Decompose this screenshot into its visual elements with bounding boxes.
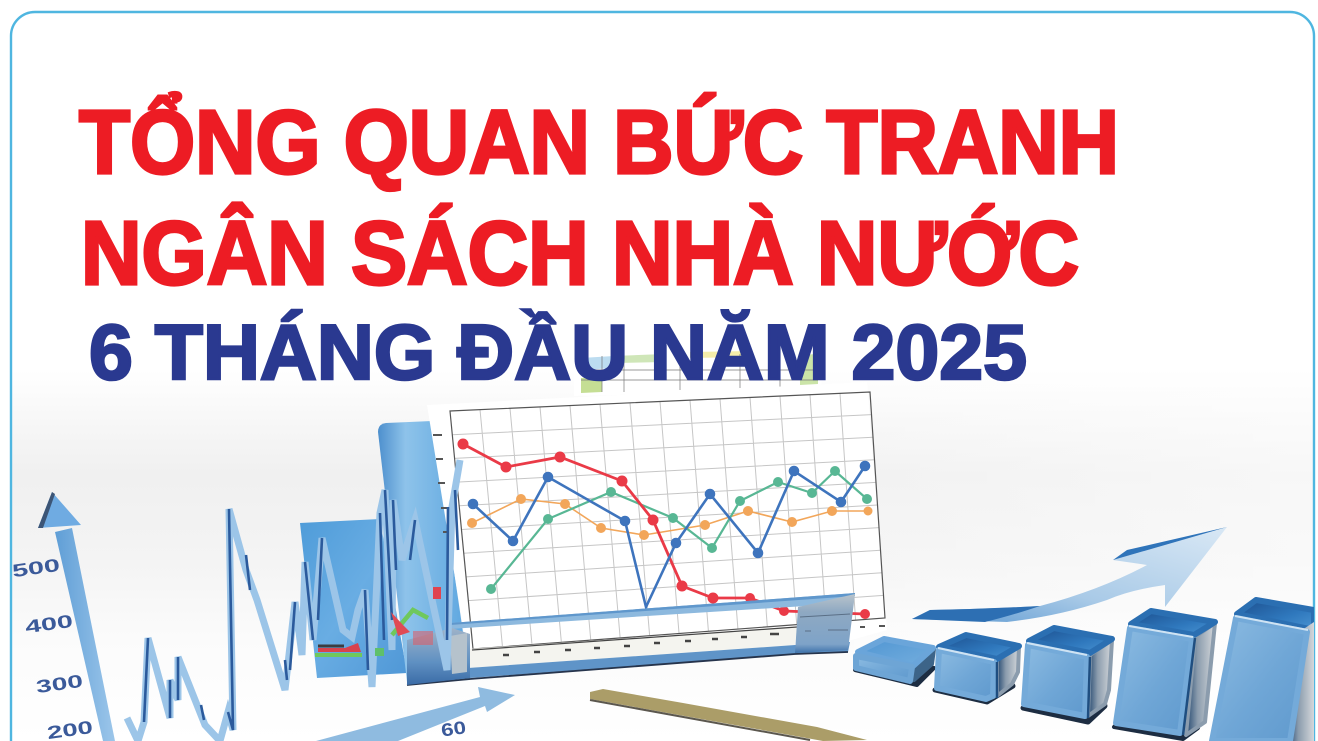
lower right-pointing arrow — [316, 687, 515, 741]
blue frame bar across chart — [450, 593, 855, 629]
series: green — [486, 466, 872, 594]
cube 2 — [935, 635, 1019, 702]
axis ticks — [433, 435, 885, 627]
chart grid — [452, 393, 884, 646]
glass base of monitor — [407, 628, 470, 685]
large axis arrow — [38, 492, 115, 741]
title line 2: NGÂN SÁCH NHÀ NƯỚC — [81, 202, 1079, 304]
axis labels: 400 — [24, 611, 74, 637]
series: orange — [468, 494, 872, 540]
coloured trade lines on panel — [315, 587, 441, 656]
bar cubes — [855, 600, 1314, 741]
cube 3 — [1023, 628, 1112, 722]
cube 4 — [1114, 611, 1215, 739]
blue back panel behind spikes — [300, 519, 407, 678]
axis labels: 300 — [35, 671, 84, 697]
axis labels — [11, 555, 467, 741]
series: red — [458, 439, 870, 618]
series: blue — [468, 461, 870, 607]
line chart sheet — [427, 382, 887, 670]
axis labels: 500 — [11, 555, 61, 581]
spreadsheet behind the chart — [574, 350, 822, 396]
lower paper strip with tick labels — [468, 627, 797, 668]
blue base band — [407, 642, 850, 685]
cube 1 — [855, 639, 934, 685]
blue upright monitor frame — [378, 421, 470, 682]
rising arrow — [912, 527, 1227, 622]
glass end cap of frame — [795, 594, 855, 653]
subtitle: 6 THÁNG ĐẦU NĂM 2025 — [89, 308, 1027, 396]
title line 1: TỔNG QUAN BỨC TRANH — [79, 91, 1119, 193]
spiky stock ribbon line — [127, 460, 460, 741]
cube 5 — [1212, 600, 1314, 741]
axis labels: 60 — [440, 717, 467, 741]
pencil — [590, 689, 867, 741]
